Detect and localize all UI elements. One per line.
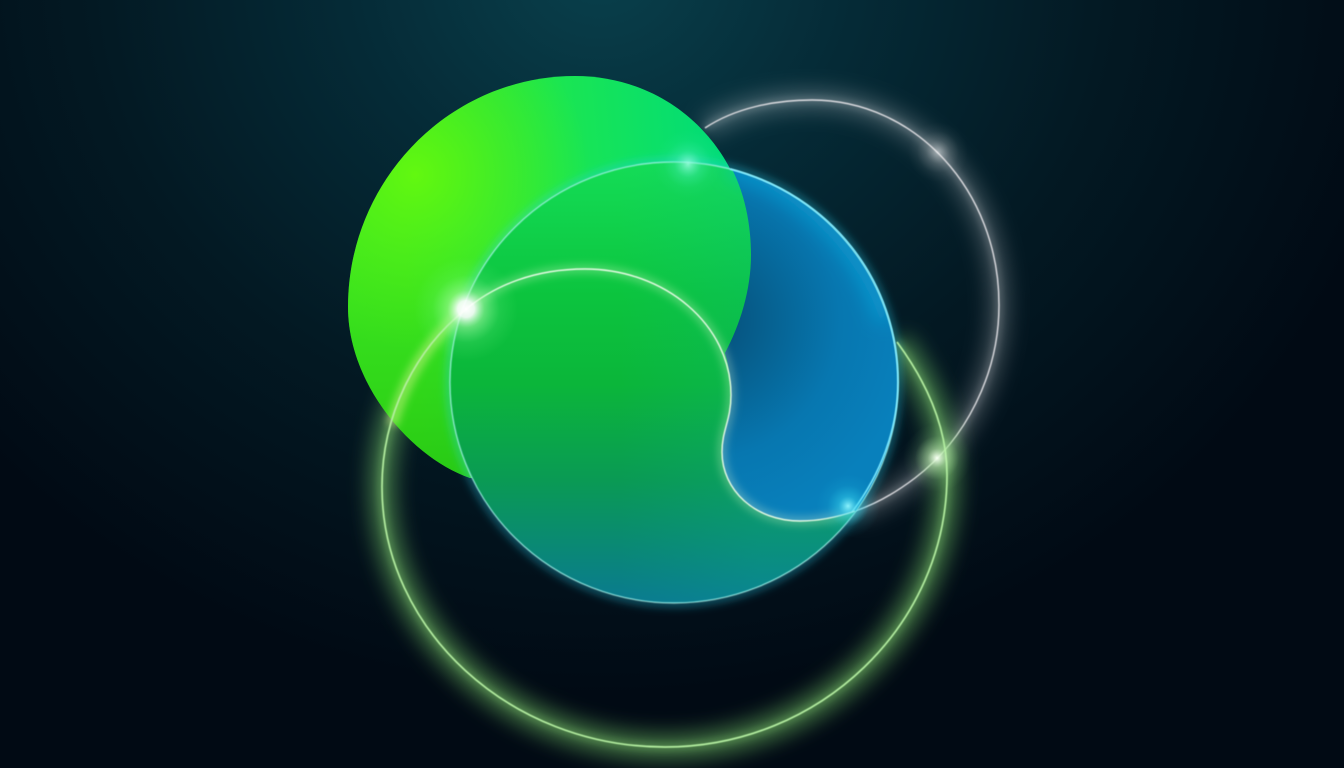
region: green overlap bbox=[450, 162, 886, 603]
region: blue lobe bbox=[722, 170, 898, 521]
region: teal tint on right of overlap bbox=[682, 167, 845, 592]
spark: top of blue disc bbox=[654, 130, 722, 198]
spark: right intersection bbox=[903, 424, 971, 492]
blue disc glow bbox=[450, 162, 898, 603]
inner curved line bbox=[465, 269, 855, 521]
green ring crisp stroke bbox=[382, 310, 947, 747]
green ring glow over green circle bbox=[392, 310, 465, 425]
spark: white ring upper right bbox=[908, 122, 968, 182]
spark: left intersection bbox=[414, 257, 518, 361]
spark: bottom intersection bbox=[816, 474, 880, 538]
blue disc with green and blue regions bbox=[450, 162, 898, 603]
blue disc outline bbox=[450, 162, 898, 603]
large green ring bbox=[382, 310, 947, 747]
white ring bbox=[705, 100, 999, 511]
blue lobe inner edge glow bbox=[730, 167, 885, 320]
green filled circle bbox=[348, 76, 751, 478]
blue arc highlight bbox=[730, 169, 898, 512]
